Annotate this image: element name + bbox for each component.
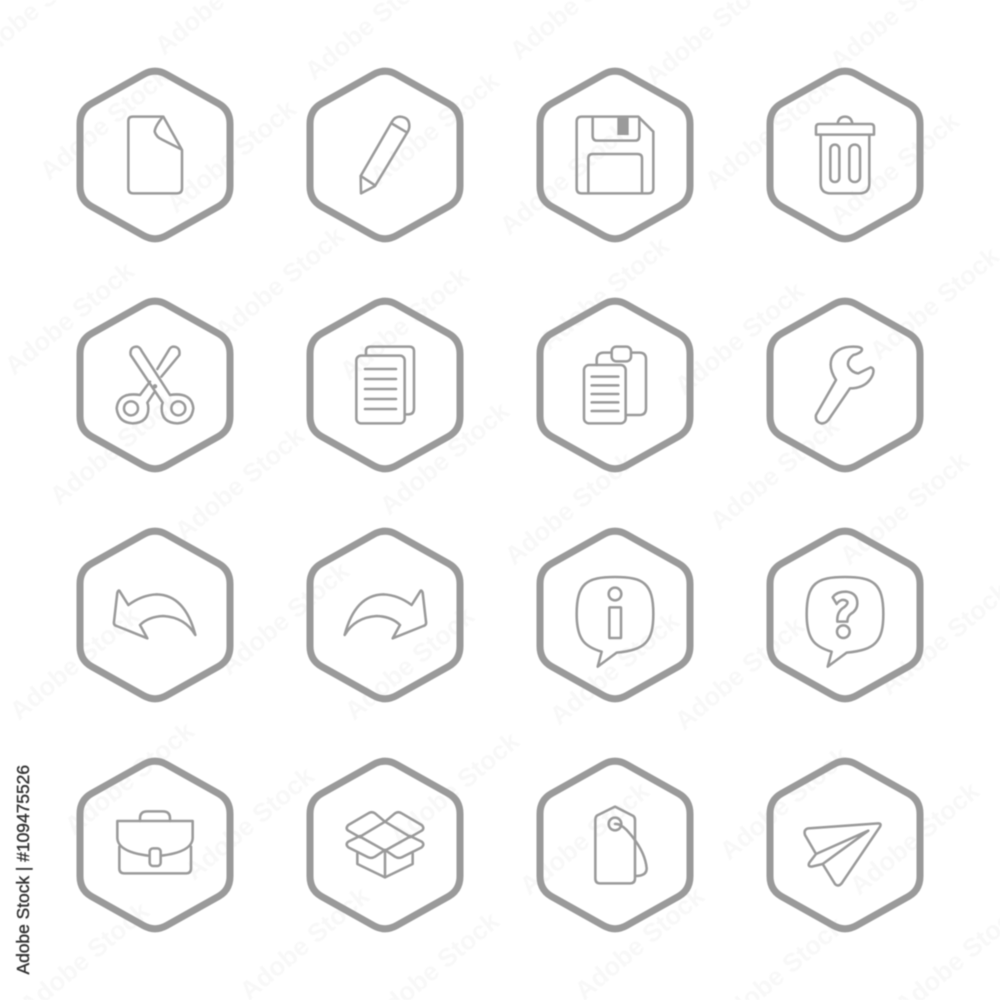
- hexagon icon: question speech bubble: [770, 531, 920, 699]
- watermark: faint Adobe Stock pattern: Adobe Stock: [4, 600, 145, 726]
- hexagon icon: reply arrow: [80, 531, 230, 699]
- hexagon icon: briefcase: [80, 761, 230, 929]
- hexagon icon: info speech bubble: [540, 531, 690, 699]
- watermark: faint Adobe Stock pattern: Adobe Stock: [544, 605, 685, 731]
- watermark: faint Adobe Stock pattern: Adobe Stock: [334, 260, 475, 386]
- watermark: faint Adobe Stock pattern: Adobe Stock: [534, 230, 675, 356]
- hexagon icon: pencil: [310, 71, 460, 239]
- watermark: faint Adobe Stock pattern: Adobe Stock: [339, 600, 480, 726]
- stock image id caption: Adobe Stock | #109475526: [13, 765, 33, 975]
- watermark: faint Adobe Stock pattern: Adobe Stock: [824, 105, 965, 231]
- watermark: faint Adobe Stock pattern: Adobe Stock: [384, 725, 525, 851]
- watermark: faint Adobe Stock pattern: Adobe Stock: [34, 60, 175, 186]
- hexagon icon: trash can: [770, 71, 920, 239]
- hexagon icon: new document: [80, 71, 230, 239]
- hexagon icon: copy documents: [310, 301, 460, 469]
- hexagon icon: price tag: [540, 761, 690, 929]
- watermark: faint Adobe Stock pattern: Adobe Stock: [494, 115, 635, 241]
- watermark: faint Adobe Stock pattern: Adobe Stock: [59, 715, 200, 841]
- watermark: faint Adobe Stock pattern: Adobe Stock: [179, 760, 320, 886]
- hexagon icon: clipboard paste: [540, 301, 690, 469]
- watermark: faint Adobe Stock pattern: Adobe Stock: [161, 93, 302, 219]
- watermark: faint Adobe Stock pattern: Adobe Stock: [514, 775, 655, 901]
- hexagon icon: paper plane: [770, 761, 920, 929]
- watermark: faint Adobe Stock pattern: Adobe Stock: [169, 420, 310, 546]
- hexagon icon: forward arrow: [310, 531, 460, 699]
- watermark: faint Adobe Stock pattern: Adobe Stock: [0, 255, 140, 381]
- watermark: faint Adobe Stock pattern: Adobe Stock: [44, 385, 185, 511]
- watermark: faint Adobe Stock pattern: Adobe Stock: [704, 410, 845, 536]
- hexagon icon: wrench: [770, 301, 920, 469]
- hexagon icon: floppy disk: [540, 71, 690, 239]
- hexagon icon: open box: [310, 761, 460, 929]
- watermark: faint Adobe Stock pattern: Adobe Stock: [669, 275, 810, 401]
- watermark: faint Adobe Stock pattern: Adobe Stock: [374, 395, 515, 521]
- watermark: faint Adobe Stock pattern: Adobe Stock: [699, 70, 840, 196]
- watermark: faint Adobe Stock pattern: Adobe Stock: [714, 740, 855, 866]
- watermark: faint Adobe Stock pattern: Adobe Stock: [844, 775, 985, 901]
- watermark: faint Adobe Stock pattern: Adobe Stock: [214, 555, 355, 681]
- watermark: faint Adobe Stock pattern: Adobe Stock: [669, 610, 810, 736]
- watermark: faint Adobe Stock pattern: Adobe Stock: [499, 445, 640, 571]
- watermark: faint Adobe Stock pattern: Adobe Stock: [364, 65, 505, 191]
- watermark: faint Adobe Stock pattern: Adobe Stock: [209, 220, 350, 346]
- hexagon icon: scissors: [80, 301, 230, 469]
- watermark: faint Adobe Stock pattern: Adobe Stock: [834, 445, 975, 571]
